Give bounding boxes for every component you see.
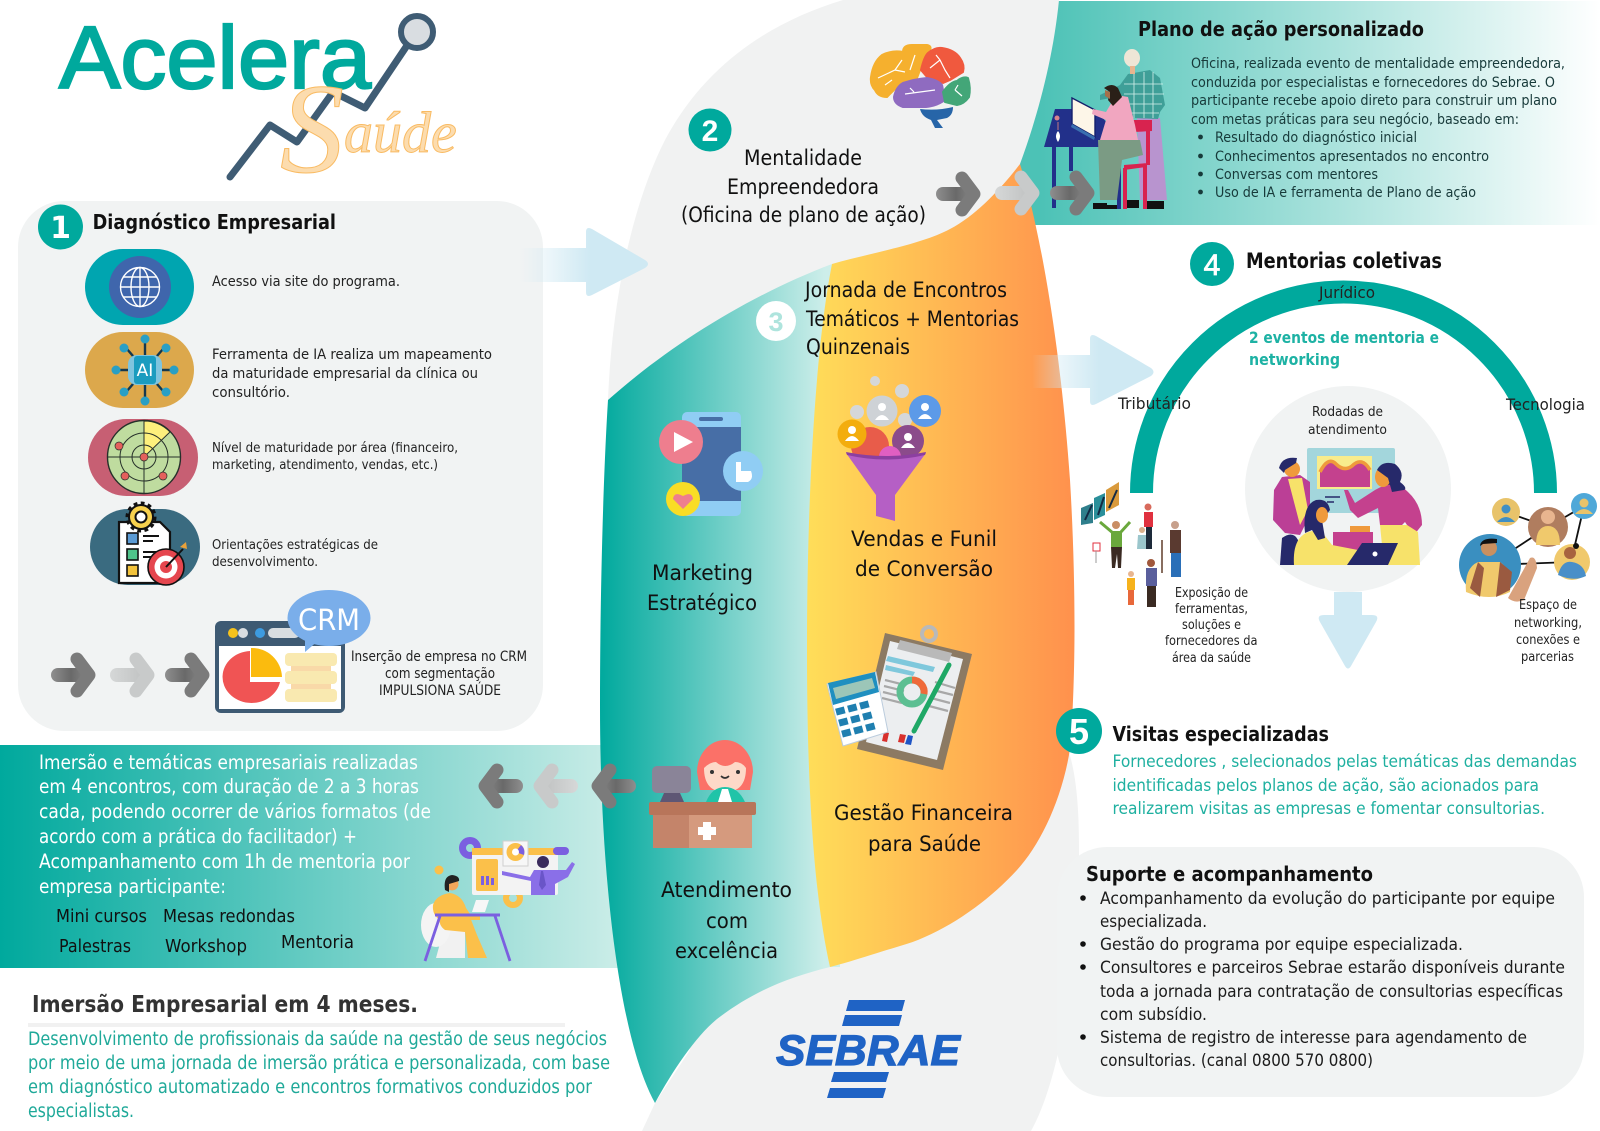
text: 2 eventos: networking [1249,350,1340,369]
heading: mentorias coletivas: Mentorias coletivas [1246,249,1442,273]
central orange shape [807,164,1074,967]
heading: visitas especializadas: Visitas especializadas [1112,722,1329,746]
text: action plan body [1191,56,1565,201]
text: atendimento com excelência: excelência [675,939,778,963]
number badge 1 [38,204,83,250]
text: action plan body: Conversas com mentores [1215,167,1378,183]
text: themes around the arch [1117,283,1585,414]
logo: Sebrae [776,1000,961,1098]
text: marketing estratégico [647,561,757,615]
arrow: light blue down to step 5 [1319,592,1377,668]
panel: suporte e acompanhamento [1057,847,1584,1097]
text: mentalidade empreendedora: Empreendedora [727,175,879,199]
text: marketing estratégico: Marketing [652,561,753,585]
text: immersion banner copy: cada, podendo ocorrer de vários formatos (de [39,800,431,823]
section: step 5 visitas especializadas [1056,708,1577,819]
logo: Acelera Saúde: Acelera [59,8,371,107]
logo: Acelera Saúde: aúde [344,100,457,165]
text: ferramenta de IA: da maturidade empresarial da clínica ou [212,366,478,382]
icon: sales funnel [838,376,941,521]
number badge 5 [1056,708,1102,754]
panel: rodadas de atendimento circle [1245,386,1451,592]
text: ferramenta de IA [212,347,492,401]
text: exposição de ferramentas: área da saúde [1172,650,1251,666]
list: support items: Consultores e parceiros Sebrae estarão disponíveis durante [1100,958,1565,978]
text: ferramenta de IA: consultório. [212,385,290,401]
heading: suporte e acompanhamento: Suporte e acompanhamento [1086,862,1373,886]
arrows: gray sequence to CRM [51,659,203,691]
list: support items: Gestão do programa por equipe especializada. [1100,935,1463,955]
illustration: team meeting [1273,448,1422,565]
text: inserção CRM: IMPULSIONA SAÚDE [379,681,501,699]
text: rodadas de atendimento [1308,404,1387,438]
illustration: exhibition with people [1081,482,1181,607]
text: vendas e funil [851,527,997,581]
text: inserção CRM: com segmentação [385,666,495,682]
section: step 4 mentorias coletivas [1032,242,1597,668]
text: action plan body: com metas práticas para seu negócio, baseado em: [1191,112,1519,128]
text: gestão financeira: para Saúde [868,832,981,856]
text: immersion banner copy: empresa participante: [39,875,226,898]
text: inserção CRM: Inserção de empresa no CRM [351,649,527,665]
icon: CRM window [215,590,370,713]
arrows: gray sequence pointing left [485,770,636,802]
number badge 2 [688,108,732,152]
panel: immersion banner background [0,745,640,968]
text: jornada de encontros: Quinzenais [806,335,910,359]
text: exposição de ferramentas: ferramentas, [1175,601,1248,617]
icon: clipboard and calculator [827,627,972,770]
text: mentalidade empreendedora [681,146,926,227]
icon: marketing phone [659,412,763,516]
text: mentalidade empreendedora: (Oficina de plano de ação) [681,203,926,227]
text: action plan body: conduzida por especialistas e fornecedores do Sebrae. O [1191,75,1555,91]
text: visitas description: identificadas pelos planos de ação, são acionados para [1112,776,1539,796]
text: formats list: Mentoria [281,932,354,953]
heading: imersão empresarial: Imersão Empresarial em 4 meses. [32,990,418,1018]
icon: checklist and target [90,505,200,585]
text: immersion banner copy: Acompanhamento com 1h de mentoria por [39,850,411,873]
list: support items: Sistema de registro de interesse para agendamento de [1100,1028,1527,1048]
arrow: light blue to step 2 [520,228,648,296]
text: action plan body: participante recebe apoio direto para construir um plano [1191,93,1557,109]
illustration: remote mentoring [421,840,575,961]
text: mentalidade empreendedora: Mentalidade [744,146,862,170]
illustration: two people at a desk [1044,49,1167,209]
number badge 4: 4 [1204,249,1220,282]
text: formats list: Mini cursos [56,906,147,927]
text: immersion banner copy: em 4 encontros, com duração de 2 a 3 horas [39,775,419,798]
text: exposição de ferramentas: fornecedores da [1165,633,1258,649]
text: action plan body: Uso de IA e ferramenta de Plano de ação [1215,185,1476,201]
central gray leaf shape [608,0,1079,1131]
text: visitas description: realizarem visitas as empresas e fomentar consultorias. [1112,799,1545,819]
panel: step 1 diagnóstico empresarial [18,201,543,731]
illustration: networking people [1459,493,1597,602]
logo: Acelera Saúde: S [280,58,344,200]
text: espaço de networking: Espaço de [1519,597,1577,613]
text: nível de maturidade: Nível de maturidade por área (financeiro, [212,440,458,456]
text: jornada de encontros: Temáticos + Mentorias [805,307,1019,331]
text: formats list: Mesas redondas [163,906,295,927]
list: support items: com subsídio. [1100,1005,1207,1025]
text: espaço de networking: conexões e [1516,632,1580,648]
text: espaço de networking: networking, [1514,615,1582,631]
text: acesso: Acesso via site do programa. [212,274,400,290]
logo: Acelera Saúde [59,8,457,200]
number badge 5: 5 [1069,711,1089,752]
text: themes around the arch: Tecnologia [1505,395,1585,414]
text: rodadas de atendimento: Rodadas de [1312,404,1383,420]
text: jornada de encontros: Jornada de Encontros [803,278,1007,302]
text: program description: especialistas. [28,1101,134,1122]
text: marketing estratégico: Estratégico [647,591,757,615]
icon: globe [85,249,194,325]
text: immersion banner copy: acordo com a prática do facilitador) + [39,825,357,848]
list: support items: toda a jornada para contratação de consultorias específicas [1100,982,1563,1002]
icon: AI network: AI [137,361,153,381]
text: jornada de encontros [803,278,1019,359]
list: support items: especializada. [1100,912,1207,932]
text: atendimento com excelência: com [706,909,748,933]
text: themes around the arch: Jurídico [1318,283,1375,302]
text: program description: em diagnóstico automatizado e encontros formativos conduzidos por [28,1077,592,1098]
text: ferramenta de IA: Ferramenta de IA realiza um mapeamento [212,347,492,363]
text: 2 eventos: 2 eventos de mentoria e [1249,328,1439,347]
number badge 1: 1 [50,211,71,246]
text: formats list: Workshop [165,936,247,957]
number badge 3 [756,301,796,341]
panel: action plan background [1020,1,1600,225]
list: support items: Acompanhamento da evolução do participante por equipe [1100,889,1555,909]
icon: brain [871,45,970,128]
text: nível de maturidade [212,440,458,473]
number badge 4 [1190,242,1234,286]
arrow: light blue into arch [1032,335,1154,405]
chart: teal arch [1142,292,1546,493]
icon: CRM window: CRM [298,603,360,637]
text: inserção CRM [351,649,527,699]
text: gestão financeira [834,801,1013,856]
text: program description: por meio de uma jornada de imersão prática e personalizada, com base [28,1053,610,1074]
text: program description [28,1029,610,1122]
text: espaço de networking [1514,597,1582,665]
arrows: gray sequence to action plan [936,177,1088,210]
logo: Sebrae: SEBRAE [776,1027,961,1075]
text: action plan body: Conhecimentos apresentados no encontro [1215,149,1489,165]
text: action plan heading: Plano de ação personalizado [1138,17,1424,41]
text: vendas e funil: Vendas e Funil [851,527,997,551]
icon: AI network [85,332,194,408]
text: immersion banner copy [39,751,431,898]
central teal shape [600,264,840,1103]
text: program description: Desenvolvimento de profissionais da saúde na gestão de seus negócios [28,1029,607,1050]
icon: radar [88,419,198,496]
icon: reception desk [649,740,756,848]
text: formats list: Palestras [59,936,131,957]
text: orientações: Orientações estratégicas de [212,537,378,553]
text: immersion banner copy: Imersão e temáticas empresariais realizadas [39,751,418,774]
text: exposição de ferramentas: Exposição de [1175,585,1248,601]
text: orientações [212,537,378,570]
text: nível de maturidade: marketing, atendimento, vendas, etc.) [212,457,438,473]
text: themes around the arch: Tributário [1117,394,1191,413]
text: atendimento com excelência: Atendimento [661,878,792,902]
list: support items [1080,889,1565,1071]
number badge 3: 3 [768,307,784,337]
text: action plan body: Resultado do diagnóstico inicial [1215,130,1417,146]
text: atendimento com excelência [661,878,792,963]
text: orientações: desenvolvimento. [212,554,318,570]
text: espaço de networking: parcerias [1521,649,1574,665]
text: exposição de ferramentas: soluções e [1182,617,1241,633]
text: formats list [56,906,354,957]
number badge 2: 2 [702,115,718,148]
text: vendas e funil: de Conversão [855,557,993,581]
text: gestão financeira: Gestão Financeira [834,801,1013,825]
heading: Diagnóstico Empresarial: Diagnóstico Empresarial [93,210,336,234]
text: rodadas de atendimento: atendimento [1308,422,1387,438]
text: exposição de ferramentas [1165,585,1258,666]
text: visitas description [1112,752,1577,819]
list: support items: consultorias. (canal 0800 570 0800) [1100,1051,1373,1071]
text: 2 eventos [1249,328,1439,369]
